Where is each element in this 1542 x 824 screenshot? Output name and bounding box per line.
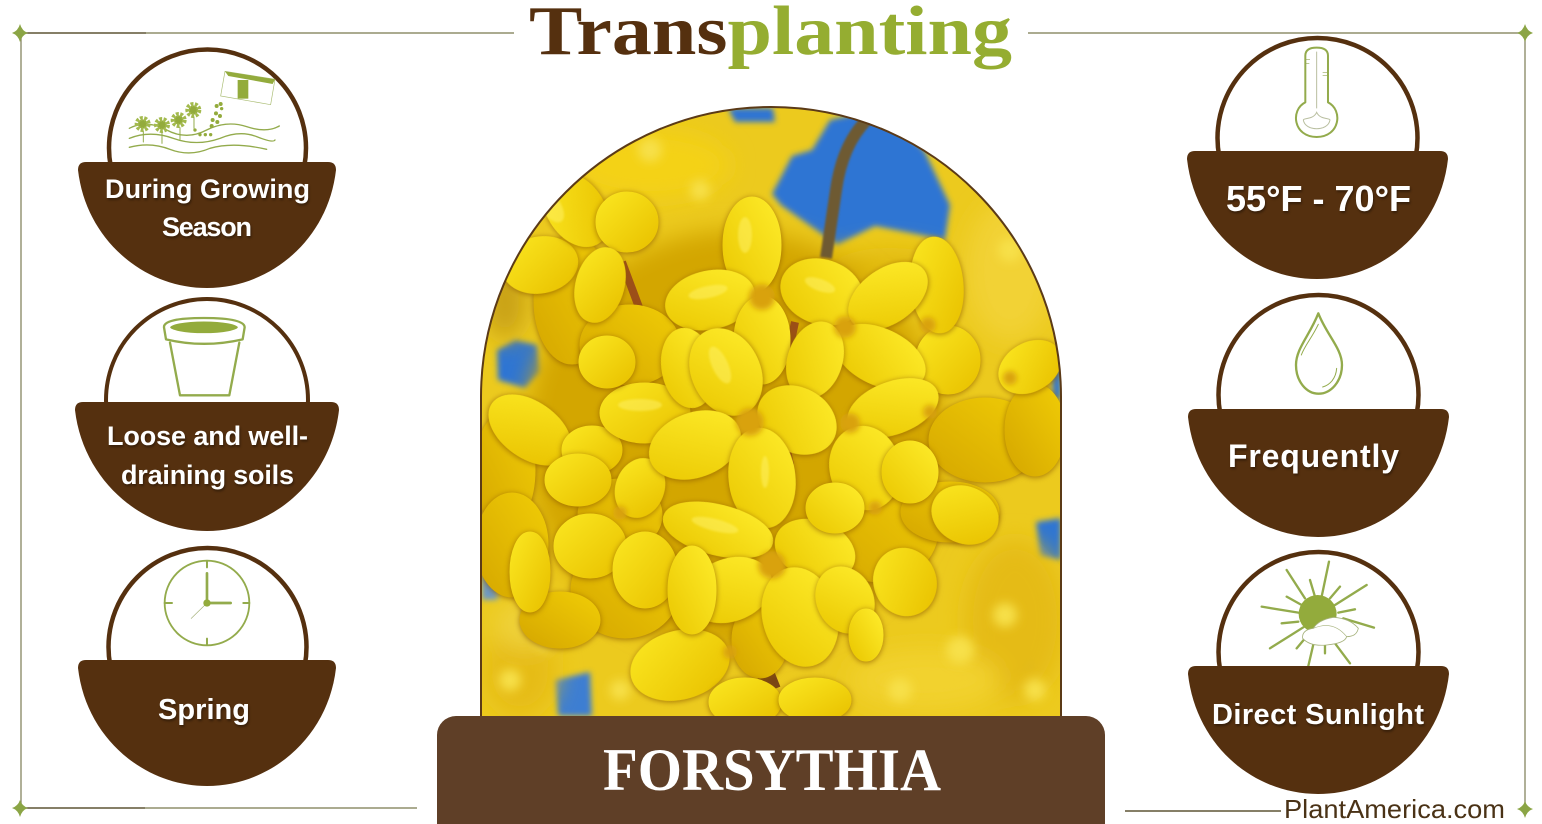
branch [826,115,872,258]
panel: sunlight [1188,552,1449,794]
panel: temperature [1187,38,1448,279]
panel: sunlight: Direct Sunlight [1212,699,1424,731]
panel: season: Spring [158,694,250,726]
panel: soil type: Loose and well- [107,421,308,451]
panel: soil type [75,299,339,531]
icon: clock [165,561,249,645]
icon: thermometer [1296,48,1337,137]
panel: soil type: draining soils [121,460,294,490]
icon: flower pot [164,318,245,395]
icon: sun behind cloud [1262,562,1374,666]
panel: temperature: 55°F - 70°F [1226,178,1411,219]
panel: watering [1188,295,1449,537]
panel: timing during growing season: During Growing [105,174,310,204]
icon: fertilizer box over flower bed [129,71,279,153]
panel: watering: Frequently [1228,438,1399,474]
name banner: FORSYTHIA [603,737,941,803]
photo: forsythia blossoms in an arch [479,107,1065,722]
shadow behind the central cluster [525,230,945,650]
soft bokeh [483,131,1065,716]
flower centres [613,284,1017,659]
photo outline [481,107,1061,716]
panel: season [78,548,336,786]
icon: water drop [1296,313,1342,394]
website credit: PlantAmerica.com [1284,794,1505,824]
name banner [437,716,1105,824]
panel: timing during growing season [78,50,336,288]
petal highlights [546,200,836,534]
panel: timing during growing season: Season [162,212,252,242]
petals [479,167,1065,722]
sky [482,108,1061,716]
